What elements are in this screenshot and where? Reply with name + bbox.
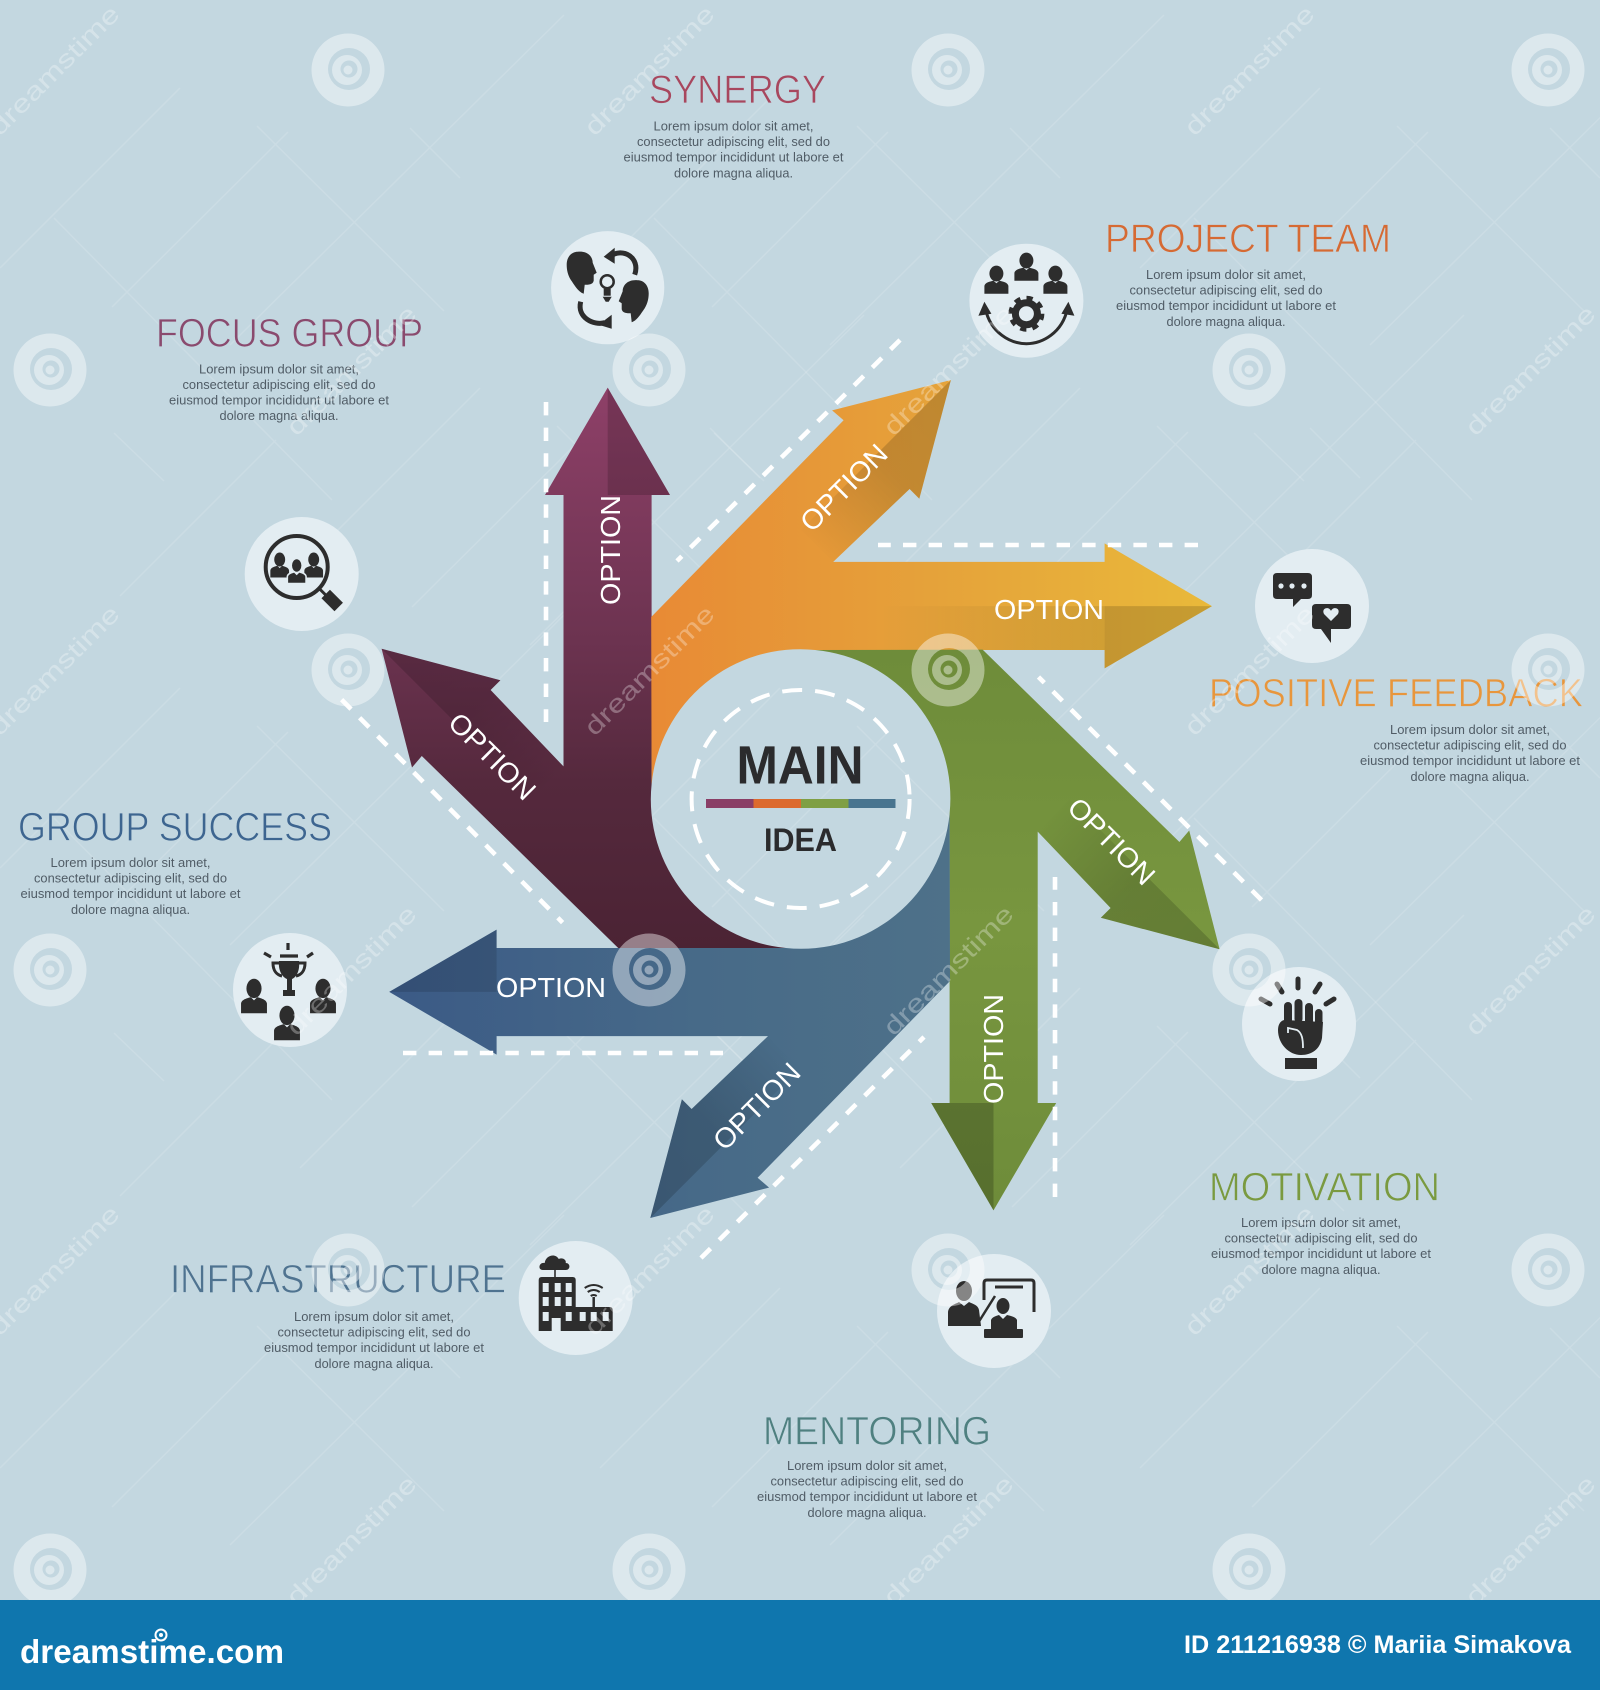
text block: mentoring: dolore magna aliqua. [808, 1505, 926, 1520]
watermark: dreamstime text: dreamstime [281, 1470, 422, 1611]
watermark: dreamstime text: dreamstime [1460, 300, 1600, 441]
watermark: dreamstime text: dreamstime [281, 300, 422, 441]
text block: project team: Lorem ipsum dolor sit amet, [1146, 267, 1306, 282]
watermark: dreamstime text: dreamstime [579, 0, 720, 141]
watermark: dreamstime text: dreamstime [878, 900, 1019, 1041]
text block: mentoring: MENTORING [763, 1410, 991, 1454]
text block: positive feedback: eiusmod tempor incididunt ut labore et [1360, 753, 1580, 768]
arrow labels: OPTION: OPTION [994, 594, 1104, 625]
text block: group success [18, 806, 332, 917]
watermark: dreamstime text: dreamstime [878, 300, 1019, 441]
watermark: dreamstime text: dreamstime [878, 1470, 1019, 1611]
text block: synergy: consectetur adipiscing elit, sed do [637, 134, 830, 149]
watermark: dreamstime text: dreamstime [1179, 1200, 1320, 1341]
icon: mentoring [937, 1254, 1051, 1368]
watermark: dreamstime text: dreamstime [579, 600, 720, 741]
icon: motivation fist [1242, 967, 1356, 1081]
footer bar: ID 211216938 © Mariia Simakova [1184, 1631, 1572, 1659]
arrow labels: OPTION: OPTION [442, 707, 542, 806]
text block: synergy: eiusmod tempor incididunt ut labore et [624, 150, 844, 165]
text block: synergy: dolore magna aliqua. [674, 165, 793, 180]
text block: motivation: MOTIVATION [1209, 1166, 1440, 1210]
text block: positive feedback: consectetur adipiscing elit, sed do [1374, 738, 1566, 753]
text block: focus group: consectetur adipiscing elit, sed do [182, 377, 376, 392]
arrow labels: OPTION: OPTION [1061, 792, 1161, 891]
text block: group success: eiusmod tempor incididunt ut labore et [20, 886, 241, 901]
centre circle: main idea: IDEA [764, 822, 837, 858]
text block: focus group: eiusmod tempor incididunt ut labore et [169, 393, 389, 408]
footer bar: dreamstime.com [20, 1633, 284, 1670]
watermark: dreamstime text: dreamstime [1460, 900, 1600, 1041]
text block: focus group: dolore magna aliqua. [220, 408, 338, 423]
icon: speech bubbles [1255, 549, 1369, 663]
watermark: dreamstime text: dreamstime [1460, 1470, 1600, 1611]
text block: project team: dolore magna aliqua. [1166, 314, 1286, 329]
watermark: dreamstime text: dreamstime [1179, 0, 1320, 141]
text block: project team: eiusmod tempor incididunt ut labore et [1116, 298, 1336, 313]
text block: group success: Lorem ipsum dolor sit amet, [50, 855, 210, 870]
text block: focus group [156, 312, 423, 423]
arrow labels: OPTION: OPTION [978, 994, 1009, 1104]
text block: infrastructure: eiusmod tempor incididunt ut labore et [264, 1340, 484, 1355]
arrow labels: OPTION: OPTION [794, 438, 894, 538]
text block: mentoring: eiusmod tempor incididunt ut labore et [757, 1489, 977, 1504]
text block: mentoring: Lorem ipsum dolor sit amet, [787, 1458, 947, 1473]
text block: mentoring [757, 1410, 991, 1520]
green arrow pair [815, 650, 1220, 1210]
text block: infrastructure: Lorem ipsum dolor sit amet, [294, 1309, 454, 1324]
text block: focus group: Lorem ipsum dolor sit amet, [199, 362, 359, 376]
text block: motivation [1209, 1166, 1440, 1277]
arrow labels: OPTION: OPTION [496, 972, 606, 1003]
text block: project team [1105, 217, 1391, 329]
icon: synergy heads and bulb [551, 231, 664, 344]
text block: group success: consectetur adipiscing elit, sed do [34, 871, 227, 886]
footer bar [0, 1600, 1600, 1690]
text block: infrastructure: dolore magna aliqua. [314, 1356, 434, 1371]
text block: infrastructure: consectetur adipiscing elit, sed do [278, 1325, 470, 1340]
centre circle: main idea: MAIN [736, 736, 864, 796]
text block: positive feedback: Lorem ipsum dolor sit amet, [1390, 722, 1550, 737]
text block: positive feedback: dolore magna aliqua. [1410, 769, 1530, 784]
text block: synergy: Lorem ipsum dolor sit amet, [654, 118, 814, 134]
dashed guide lines [342, 340, 1262, 1258]
text block: motivation: eiusmod tempor incididunt ut labore et [1211, 1246, 1431, 1261]
text block: synergy: SYNERGY [649, 68, 826, 112]
watermark: dreamstime text: dreamstime [579, 1200, 720, 1341]
text block: motivation: dolore magna aliqua. [1262, 1262, 1380, 1277]
text block: motivation: consectetur adipiscing elit, sed do [1224, 1231, 1418, 1246]
arrow labels: OPTION [442, 438, 1161, 1156]
icon: project team [969, 244, 1083, 358]
blue arrow pair [389, 814, 950, 1218]
text block: focus group: FOCUS GROUP [156, 312, 423, 356]
text block: motivation: Lorem ipsum dolor sit amet, [1241, 1215, 1401, 1230]
arrow labels: OPTION: OPTION [707, 1057, 807, 1156]
icon: infrastructure building [519, 1241, 633, 1355]
icon: focus group magnifier [245, 517, 359, 631]
orange arrow pair [651, 380, 1212, 784]
text block: positive feedback [1209, 672, 1583, 784]
icon: group success trophy [233, 933, 347, 1047]
purple arrow pair [382, 388, 786, 948]
watermark: dreamstime text: dreamstime [1179, 600, 1320, 741]
text block: project team: consectetur adipiscing elit, sed do [1130, 283, 1322, 298]
text block: mentoring: consectetur adipiscing elit, sed do [770, 1474, 964, 1489]
text block: infrastructure: INFRASTRUCTURE [170, 1258, 506, 1302]
text block: synergy [624, 68, 844, 180]
text block: group success: dolore magna aliqua. [71, 902, 190, 917]
text block: group success: GROUP SUCCESS [18, 806, 332, 850]
text block: project team: PROJECT TEAM [1105, 217, 1391, 261]
centre circle: main idea [692, 690, 910, 908]
watermark: dreamstime text: dreamstime [281, 900, 422, 1041]
arrow labels: OPTION: OPTION [595, 495, 626, 605]
text block: infrastructure [170, 1258, 506, 1371]
